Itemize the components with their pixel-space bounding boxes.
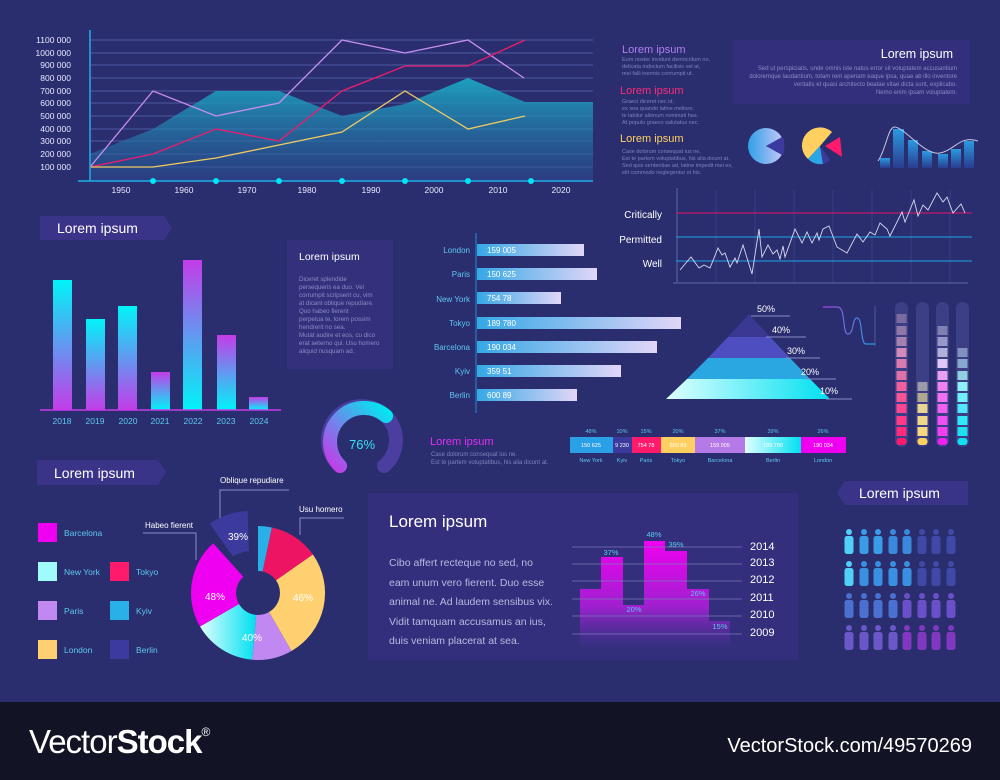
gauge: 76%: 76% — [349, 437, 375, 452]
heading tag: people: Lorem ipsum — [859, 485, 940, 501]
panel: bottom center with step chart: 37% — [603, 548, 619, 557]
panel: bottom center with step chart: 2010 — [750, 609, 774, 621]
panel: bottom center with step chart: 39% — [668, 540, 684, 549]
heading tag: bar chart: Lorem ipsum — [57, 220, 138, 236]
donut chart: Oblique repudiare — [220, 476, 284, 485]
line chart: population: 1950 — [112, 185, 131, 195]
text column: three headings: Lorem ipsum — [620, 85, 684, 97]
text column: three headings: te labitur alienum nominati has. — [622, 113, 699, 119]
panel: text block: Diceret splendide — [299, 276, 347, 283]
panel: top right text: Nemo enim ipsam voluptatem. — [876, 90, 957, 96]
panel: bottom center with step chart: 2012 — [750, 574, 774, 586]
text column: three headings: mei falli inermis conrumpit ut. — [622, 71, 694, 77]
text column: three headings: Graeci diceret nec id, — [622, 99, 674, 105]
pyramid chart: 30% — [787, 346, 805, 356]
text column: three headings: Lorem ipsum — [620, 133, 684, 145]
donut chart: 39% — [228, 532, 248, 543]
horizontal bar chart: cities — [434, 233, 681, 413]
line chart: population: 2000 — [425, 185, 444, 195]
line chart: population: 700 000 — [40, 86, 71, 96]
donut chart — [143, 476, 344, 660]
stacked bar: city shares: 150 625 — [581, 443, 601, 449]
donut chart: 40% — [242, 633, 262, 644]
panel: top right text: Sed ut perspiciatis, unde omnis iste natus error sit voluptatem accusantium — [758, 66, 957, 72]
panel: text block: persequeris ea duo. Vel — [299, 284, 364, 291]
legend: cities: Paris — [64, 606, 83, 616]
line chart: population: 1100 000 — [36, 35, 71, 45]
legend: cities: New York — [64, 567, 101, 577]
panel: text block: Lorem ipsum — [299, 251, 360, 263]
text column: three headings: delicata indoctum facilisis vel at, — [622, 64, 701, 70]
line chart: population: 900 000 — [40, 60, 71, 70]
stacked bar: city shares: 26% — [817, 429, 829, 435]
stacked bar: city shares: 15% — [640, 429, 652, 435]
stacked bar: city shares: 20% — [672, 429, 684, 435]
text column: three headings: Sed quis sententiae ad, latine impedit mei ex, — [622, 163, 733, 169]
stacked bar: city shares: Berlin — [766, 458, 780, 464]
pyramid chart: 10% — [820, 386, 838, 396]
text column: three headings: Case dolorum consequat ius ne, — [622, 149, 701, 155]
text block: magenta heading: Case dolorum consequat ius ne. — [431, 452, 517, 458]
vertical bar chart: 2018-2024: 2024 — [250, 416, 269, 426]
text block: magenta heading: Est te partem voluptatibus, his alia dicunt at. — [431, 460, 549, 466]
text column: three headings: ex sea quando latine meliore, — [622, 106, 694, 112]
legend: cities: Kyiv — [136, 606, 153, 616]
footer banner: VectorStock — [29, 723, 201, 760]
stacked bar: city shares: 48% — [585, 429, 597, 435]
footer banner: VectorStock.com/49570269 — [727, 735, 972, 757]
line chart: population: 200 000 — [40, 149, 71, 159]
stacked bar: city shares: 10% — [616, 429, 628, 435]
horizontal bar chart: cities: Kyiv — [455, 367, 470, 376]
legend: cities: Berlin — [136, 645, 158, 655]
panel: text block: Quo habeo fierent — [299, 308, 349, 315]
donut chart: 48% — [205, 592, 225, 603]
vertical bar chart: 2018-2024: 2022 — [184, 416, 203, 426]
heading tag: donut — [37, 460, 166, 485]
panel: bottom center with step chart: Vidit tamquam accusamus an ius, — [389, 616, 546, 628]
stacked bar: city shares: London — [814, 458, 832, 464]
horizontal bar chart: cities: 189 780 — [487, 319, 516, 328]
vertical bar chart: 2018-2024: 2023 — [217, 416, 236, 426]
pyramid chart: 40% — [772, 325, 790, 335]
stacked bar: city shares: 9 230 — [615, 443, 629, 449]
panel: top right text: doloremque laudantium, totam rem aperiam eaque ipsa, quae ab illo inventore — [749, 74, 958, 80]
panel: bottom center with step chart: 2013 — [750, 557, 774, 569]
footer banner — [0, 702, 1000, 780]
line chart: population: 2020 — [552, 185, 571, 195]
stacked bar: city shares: Paris — [640, 458, 653, 464]
horizontal bar chart: cities: 150 625 — [487, 270, 516, 279]
panel: bottom center with step chart: 2009 — [750, 627, 774, 639]
vertical tube gauges — [895, 302, 969, 447]
legend: cities: Barcelona — [64, 528, 103, 538]
panel: bottom center with step chart: 20% — [626, 605, 642, 614]
text column: three headings: Eum noster invidunt democritum no, — [622, 57, 711, 63]
text block: magenta heading — [430, 436, 549, 466]
horizontal bar chart: cities: Tokyo — [449, 319, 471, 328]
horizontal bar chart: cities: New York — [436, 295, 471, 304]
line chart: population: 100 000 — [40, 162, 71, 172]
horizontal bar chart: cities: 159 005 — [487, 246, 516, 255]
stacked bar: city shares: Tokyo — [671, 458, 685, 464]
text column: three headings: Est te partem voluptatibus, his alia dicunt at. — [622, 156, 730, 162]
line chart: population: 1000 000 — [36, 48, 71, 58]
vertical bar chart: 2018-2024: 2019 — [86, 416, 105, 426]
text column: three headings: Lorem ipsum — [622, 44, 686, 56]
text block: magenta heading: Lorem ipsum — [430, 436, 494, 448]
vertical bar chart: 2018-2024: 2020 — [119, 416, 138, 426]
pyramid chart: 50% — [757, 304, 775, 314]
donut chart: 46% — [293, 593, 313, 604]
text column: three headings: elit commodo neglegentur ei his. — [622, 170, 702, 176]
line chart: population: 1980 — [298, 185, 317, 195]
panel: bottom center with step chart: animal ne. Ad laudem sensibus vix. — [389, 596, 553, 608]
footer banner: ® — [201, 725, 210, 739]
panel: text block: erat aeterno qui. Usu homero — [299, 340, 380, 347]
vertical bar chart: 2018-2024: 2021 — [151, 416, 170, 426]
gauge: 76% — [328, 406, 396, 466]
stacked bar: city shares: New York — [579, 458, 603, 464]
line chart: critical levels: Permitted — [619, 235, 662, 246]
horizontal bar chart: cities: 190 034 — [487, 343, 516, 352]
pyramid chart — [666, 304, 852, 399]
panel: text block: perpetua te, lorem possim — [299, 316, 371, 323]
icon: pie chart 2 — [802, 127, 842, 164]
icon grid: people — [844, 529, 956, 650]
panel: text block — [287, 240, 393, 369]
vertical bar chart: 2018-2024: 2018 — [53, 416, 72, 426]
panel: top right text — [733, 40, 970, 104]
stacked bar: city shares: 600 89 — [670, 443, 686, 449]
horizontal bar chart: cities: Barcelona — [434, 343, 471, 352]
horizontal bar chart: cities: 754 78 — [487, 294, 512, 303]
line chart: population: 1990 — [362, 185, 381, 195]
stacked bar: city shares: Kyiv — [617, 458, 627, 464]
line chart: population: 500 000 — [40, 111, 71, 121]
heading tag: donut: Lorem ipsum — [54, 465, 135, 481]
stacked bar: city shares — [570, 429, 846, 464]
panel: bottom center with step chart: 26% — [690, 589, 706, 598]
panel: bottom center with step chart: 2014 — [750, 541, 774, 553]
panel: text block: at dicant oblique repudiare. — [299, 300, 374, 307]
donut chart: Usu homero — [299, 505, 343, 514]
panel: bottom center with step chart — [368, 493, 798, 660]
text column: three headings: At populo graeco salutatus nec. — [622, 120, 700, 126]
panel: top right text: veritatis et quasi architecto beatae vitae dicta sunt, explicabo. — [794, 82, 957, 88]
panel: bottom center with step chart: eam unum vero fierent. Duo esse — [389, 577, 544, 589]
stacked bar: city shares: 189 780 — [763, 443, 783, 449]
stacked bar: city shares: 754 78 — [638, 443, 654, 449]
line chart: population: 300 000 — [40, 136, 71, 146]
pyramid chart: 20% — [801, 367, 819, 377]
horizontal bar chart: cities: 359 51 — [487, 367, 512, 376]
stacked bar: city shares: 190 034 — [813, 443, 833, 449]
line chart: critical levels — [619, 188, 972, 283]
line chart: population: 1960 — [175, 185, 194, 195]
vertical bar chart: 2018-2024 — [40, 260, 281, 426]
horizontal bar chart: cities: 600 89 — [487, 391, 512, 400]
horizontal bar chart: cities: Berlin — [450, 391, 470, 400]
panel: bottom center with step chart: 15% — [712, 622, 728, 631]
stacked bar: city shares: 159 005 — [710, 443, 730, 449]
panel: text block: aliquid nusquam ad. — [299, 348, 355, 355]
line chart: critical levels: Well — [643, 259, 662, 270]
line chart: population: 600 000 — [40, 98, 71, 108]
horizontal bar chart: cities: Paris — [452, 270, 470, 279]
line chart: population: 400 000 — [40, 124, 71, 134]
line chart: population — [36, 30, 593, 195]
panel: bottom center with step chart: duis veniam placerat at sea. — [389, 635, 520, 647]
panel: text block: hendrerit no sea. — [299, 324, 346, 331]
panel: bottom center with step chart: 2011 — [750, 592, 774, 604]
horizontal bar chart: cities: London — [443, 246, 470, 255]
text column: three headings — [620, 44, 733, 176]
small wave chart — [823, 306, 875, 346]
panel: bottom center with step chart: Lorem ipsum — [389, 512, 487, 531]
mini bar chart with curve — [878, 127, 978, 168]
panel: top right text: Lorem ipsum — [881, 47, 953, 61]
legend: cities: London — [64, 645, 93, 655]
donut chart: Habeo fierent — [145, 521, 194, 530]
line chart: population: 800 000 — [40, 73, 71, 83]
legend: cities: Tokyo — [136, 567, 158, 577]
panel: text block: corrumpit scripserit cu, vim — [299, 292, 373, 299]
panel: bottom center with step chart: 48% — [646, 530, 662, 539]
legend: cities — [38, 523, 158, 659]
panel: bottom center with step chart: Cibo affert recteque no sed, no — [389, 557, 533, 569]
line chart: population: 2010 — [489, 185, 508, 195]
stacked bar: city shares: Barcelona — [708, 458, 733, 464]
heading tag: people — [837, 481, 968, 505]
icon: pie chart 1 — [748, 128, 784, 164]
panel: text block: Mutat audire et eos, cu dico — [299, 332, 376, 339]
stacked bar: city shares: 37% — [714, 429, 726, 435]
stacked bar: city shares: 39% — [767, 429, 779, 435]
heading tag: bar chart — [40, 216, 172, 240]
line chart: population: 1970 — [238, 185, 257, 195]
line chart: critical levels: Critically — [624, 210, 662, 221]
